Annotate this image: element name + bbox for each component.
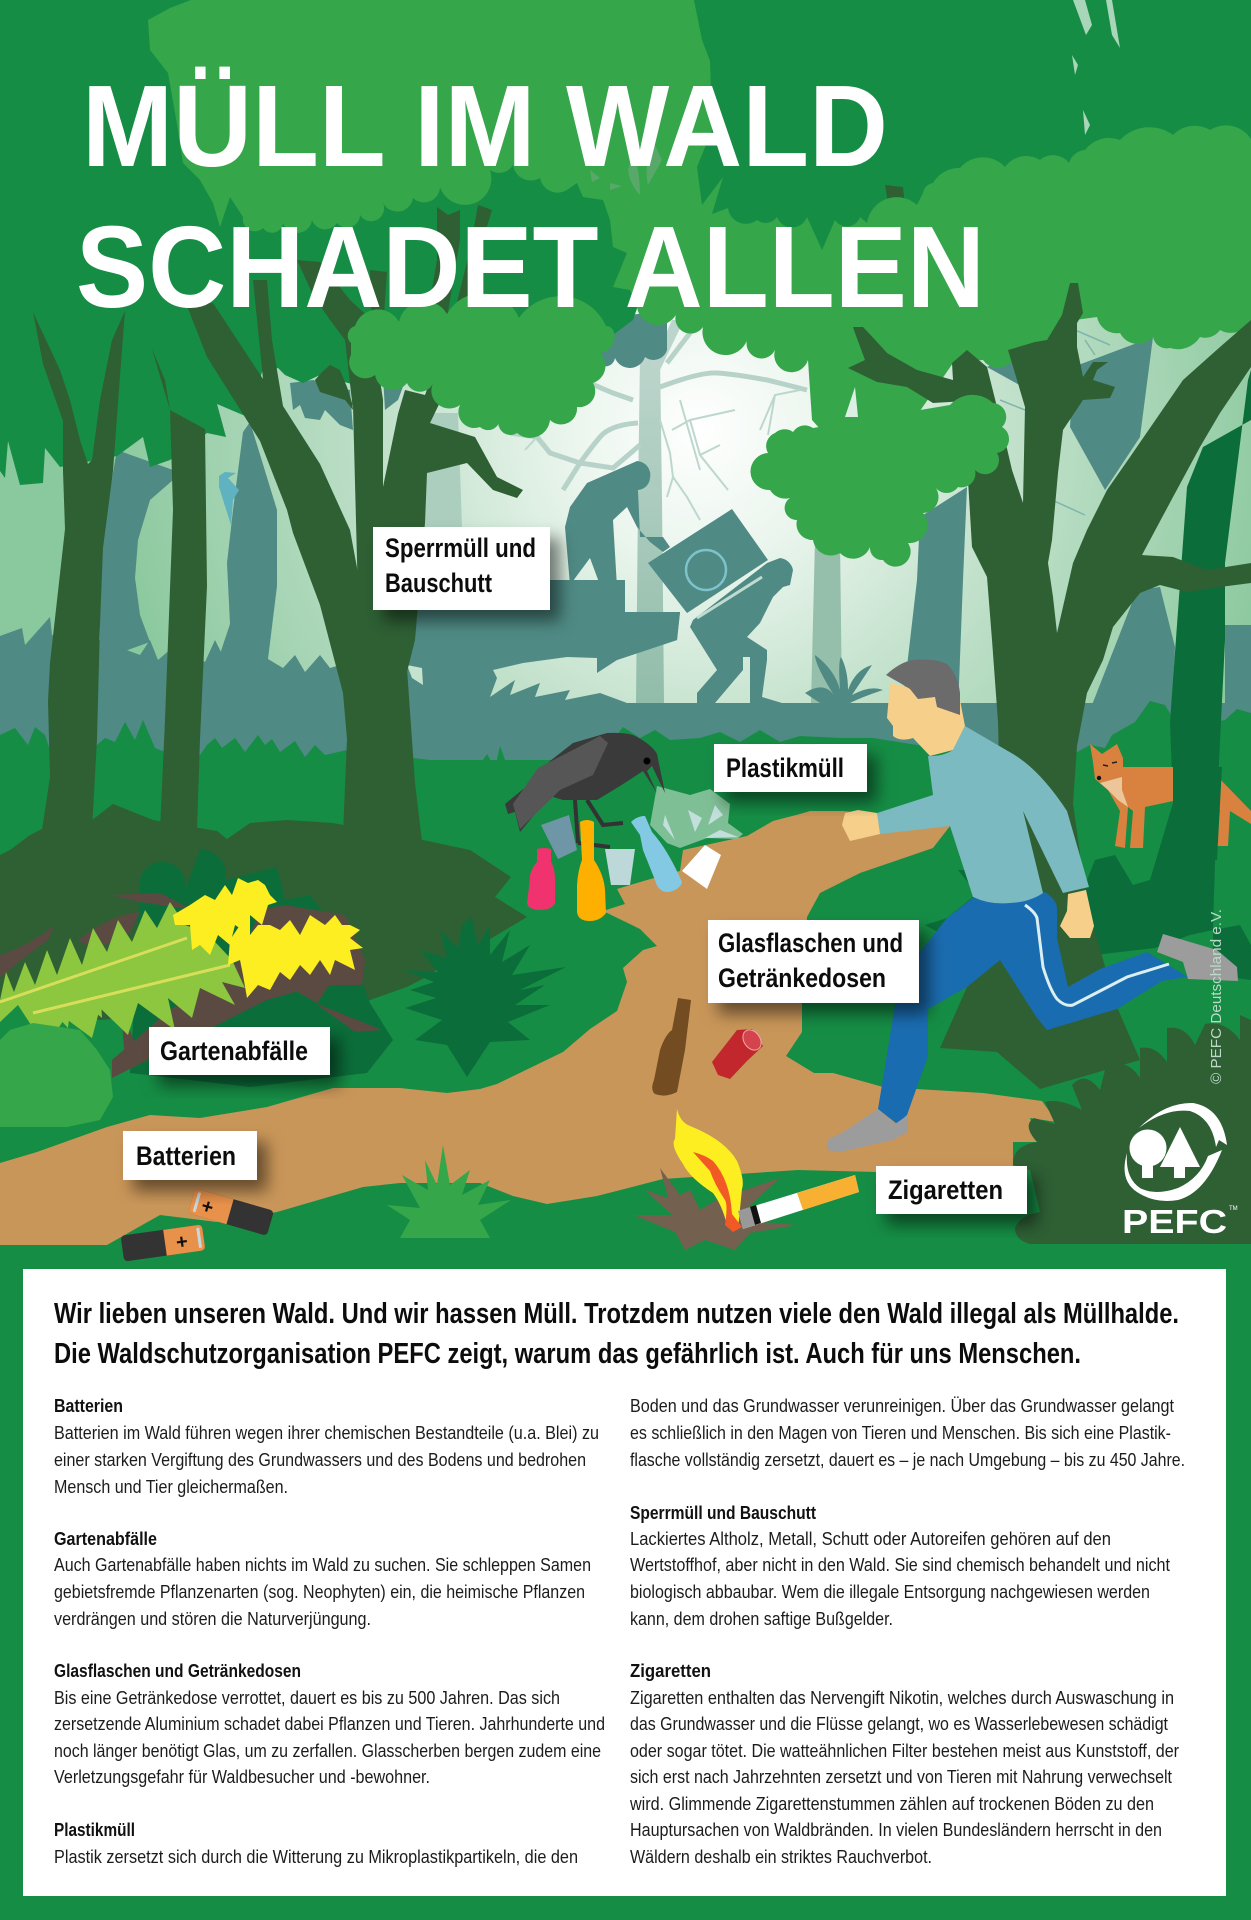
fox (1090, 744, 1251, 848)
runner trousers (878, 892, 1188, 1124)
litter: orange bottle (577, 820, 606, 921)
faded spots in canopy (590, 145, 662, 195)
section: Glasflaschen und Getränkedosen: zersetzende Aluminium schadet dabei Pflanzen und Tieren. Jahrhunderte und (54, 1714, 605, 1734)
title (76, 61, 985, 332)
label: Glasflaschen und Getränkedosen: Glasflaschen und (718, 928, 903, 958)
misty sky (0, 0, 1251, 760)
intro text (54, 1298, 1179, 1370)
small fern silhouette (805, 655, 883, 703)
litter: plastic bag (650, 786, 743, 848)
section: Glasflaschen und Getränkedosen: Verletzungsgefahr für Waldbesucher und -bewohner. (54, 1767, 430, 1787)
section: Gartenabfälle: verdrängen und stören die Naturverjüngung. (54, 1609, 371, 1629)
label: Sperrmüll und Bauschutt (373, 527, 550, 610)
forest path (0, 811, 1057, 1245)
battery one (188, 1188, 274, 1236)
litter: cups (541, 815, 721, 889)
section: Zigaretten: das Grundwasser und die Flüsse gelangt, wo es Wasserlebewesen schädigt (630, 1714, 1168, 1734)
section: Plastikmüll (54, 1396, 1185, 1867)
section: Glasflaschen und Getränkedosen: Glasflaschen und Getränkedosen (54, 1661, 301, 1681)
battery two (121, 1224, 205, 1262)
title: MÜLL IM WALD (82, 61, 888, 191)
forest scene illustration (0, 0, 1251, 1270)
PEFC logo (1122, 1103, 1238, 1240)
light bush, left (0, 1023, 113, 1127)
tree: far left (33, 311, 125, 830)
canopy gap (845, 387, 858, 417)
section: Sperrmüll und Bauschutt: biologisch abbaubar. Wem die illegale Entsorgung nachgewiesen werden (630, 1582, 1150, 1602)
garden waste leaves (0, 878, 363, 1038)
section: Plastikmüll: Plastikmüll (54, 1820, 135, 1840)
section: Batterien (54, 1396, 599, 1497)
section: Batterien: einer starken Vergiftung des Grundwassers und des Bodens und bedrohen (54, 1450, 586, 1470)
flame (674, 1109, 743, 1232)
bottom grass tuft (387, 1145, 511, 1238)
label: Batterien (123, 1131, 257, 1180)
runner back hand (1060, 890, 1094, 938)
PEFC logo: PEFC (1122, 1203, 1227, 1240)
panel: explanatory text (23, 1269, 1226, 1896)
tree: forked trunk with branch (297, 260, 523, 700)
background figure carrying a washing machine (565, 461, 883, 703)
label: Zigaretten: Zigaretten (888, 1175, 1003, 1205)
pale background trees (425, 320, 1110, 703)
label: Glasflaschen und Getränkedosen: Getränkedosen (718, 963, 886, 993)
section: Gartenabfälle (54, 1529, 591, 1629)
washing machine (648, 509, 768, 613)
section: Glasflaschen und Getränkedosen (54, 1661, 605, 1787)
garden waste brown branches (0, 893, 382, 1078)
trouser stripe (1025, 905, 1169, 1005)
first person silhouette (565, 461, 670, 587)
section: Sperrmüll und Bauschutt: Sperrmüll und Bauschutt (630, 1503, 816, 1523)
light canopy lobe, centre (348, 293, 615, 438)
section: Plastikmüll: Boden und das Grundwasser verunreinigen. Über das Grundwasser gelangt (630, 1396, 1174, 1416)
runner front hand (842, 810, 880, 841)
label: Gartenabfälle (149, 1027, 330, 1075)
section: Gartenabfälle: Auch Gartenabfälle haben nichts im Wald zu suchen. Sie schleppen Samen (54, 1555, 591, 1575)
tree: right slim trunk (1085, 370, 1251, 980)
label: Batterien: Batterien (136, 1141, 236, 1171)
section: Sperrmüll und Bauschutt: Lackiertes Altholz, Metall, Schutt oder Autoreifen gehören auf den (630, 1529, 1111, 1549)
crow (505, 733, 665, 847)
section: Sperrmüll und Bauschutt: kann, dem drohen saftige Bußgelder. (630, 1609, 893, 1629)
runner hair (886, 660, 960, 715)
litter: crushed can (712, 1026, 765, 1079)
runner head (887, 683, 965, 756)
section: Sperrmüll und Bauschutt (630, 1503, 1170, 1629)
battery one: + (199, 1195, 216, 1219)
batteries (121, 1188, 274, 1262)
tree: diagonal trunk (187, 280, 423, 850)
section: Plastikmüll: Plastik zersetzt sich durch die Witterung zu Mikroplastikpartikeln, die den (54, 1847, 578, 1867)
dark bush, left (0, 804, 527, 1020)
forest floor (0, 701, 1251, 1270)
tree limbs under canopy (370, 185, 906, 330)
fox foreground tree (1173, 767, 1222, 860)
title: SCHADET ALLEN (76, 202, 985, 332)
section: Zigaretten: Wäldern deshalb ein striktes Rauchverbot. (630, 1847, 932, 1867)
section: Plastikmüll: flasche vollständig zersetzt, dauert es – je nach Umgebung – bis zu 450 Jahre. (630, 1450, 1185, 1470)
section: Gartenabfälle: gebietsfremde Pflanzenarten (sog. Neophyten) ein, die heimische Pflanzen (54, 1582, 585, 1602)
small pale clearing detail (407, 665, 423, 685)
section: Zigaretten: Zigaretten (630, 1661, 711, 1681)
fern (403, 917, 566, 1077)
section: Sperrmüll und Bauschutt: Wertstoffhof, aber nicht in den Wald. Sie sind chemisch behandelt und nicht (630, 1555, 1170, 1575)
section: Glasflaschen und Getränkedosen: noch länger benötigt Glas, um zu zerfallen. Glasscherben bergen zudem eine (54, 1741, 601, 1761)
tree: second left (152, 349, 207, 830)
section: Plastikmüll: es schließlich in den Magen von Tieren und Menschen. Bis sich eine Plastik- (630, 1423, 1171, 1443)
section: Batterien: Batterien (54, 1396, 123, 1416)
runner shirt (877, 726, 1089, 903)
cigarette (738, 1175, 859, 1229)
section: Zigaretten (629, 1661, 1179, 1867)
back canopy (0, 0, 1251, 485)
section: Zigaretten: Hauptursachen von Waldbränden. In vielen Bundesländern herrscht in den (630, 1820, 1162, 1840)
light canopy spanning top and right (148, 0, 1251, 440)
section: Zigaretten: sich erst nach Jahrzehnten zersetzt und von Tieren mit Nahrung verwechselt (630, 1767, 1172, 1787)
label: Zigaretten (876, 1166, 1027, 1214)
teal midground forest (0, 310, 1251, 760)
battery two: + (175, 1231, 189, 1254)
label: Glasflaschen und Getränkedosen (708, 920, 919, 1003)
section: Zigaretten: Zigaretten enthalten das Nervengift Nikotin, welches durch Auswaschung in (630, 1688, 1174, 1708)
runner (827, 660, 1238, 1152)
woodpecker (219, 472, 239, 525)
litter: blue bottle (631, 816, 682, 892)
litter: pink bottle (527, 848, 555, 910)
section: Zigaretten: wird. Glimmende Zigarettenstummen zählen auf trockenen Böden zu den (629, 1794, 1154, 1814)
top-right canopy gaps (1072, 0, 1120, 135)
section: Gartenabfälle: Gartenabfälle (54, 1529, 157, 1549)
dark bush with logo background (1013, 1015, 1251, 1244)
section: Glasflaschen und Getränkedosen: Bis eine Getränkedose verrottet, dauert es bis zu 500 Jahren. Das sich (54, 1688, 560, 1708)
dark green undergrowth (130, 850, 393, 1087)
runner shoes (827, 934, 1238, 1152)
litter: brown bottle (652, 998, 691, 1096)
dark green bush by runner (900, 870, 1000, 960)
PEFC logo: TM (1229, 1206, 1238, 1212)
light canopy lobe, right (750, 395, 1009, 567)
label: Plastikmüll (714, 744, 867, 792)
section: Zigaretten: oder sogar tötet. Die watteähnlichen Filter bestehen meist aus Kunststoff, der (630, 1741, 1179, 1761)
section: Batterien: Mensch und Tier gleichermaßen. (54, 1477, 288, 1497)
copyright note: © PEFC Deutschland e.V. (1208, 909, 1225, 1084)
large trunk: right oak (848, 283, 1251, 1089)
second person silhouette (690, 558, 793, 703)
label: Sperrmüll und Bauschutt: Bauschutt (385, 568, 492, 598)
label: Plastikmüll: Plastikmüll (726, 753, 844, 783)
label: Sperrmüll und Bauschutt: Sperrmüll und (385, 533, 536, 563)
brown burnt grass (633, 1168, 797, 1250)
section: Batterien: Batterien im Wald führen wegen ihrer chemischen Bestandteile (u.a. Blei) zu (54, 1423, 599, 1443)
label: Gartenabfälle: Gartenabfälle (160, 1036, 308, 1066)
